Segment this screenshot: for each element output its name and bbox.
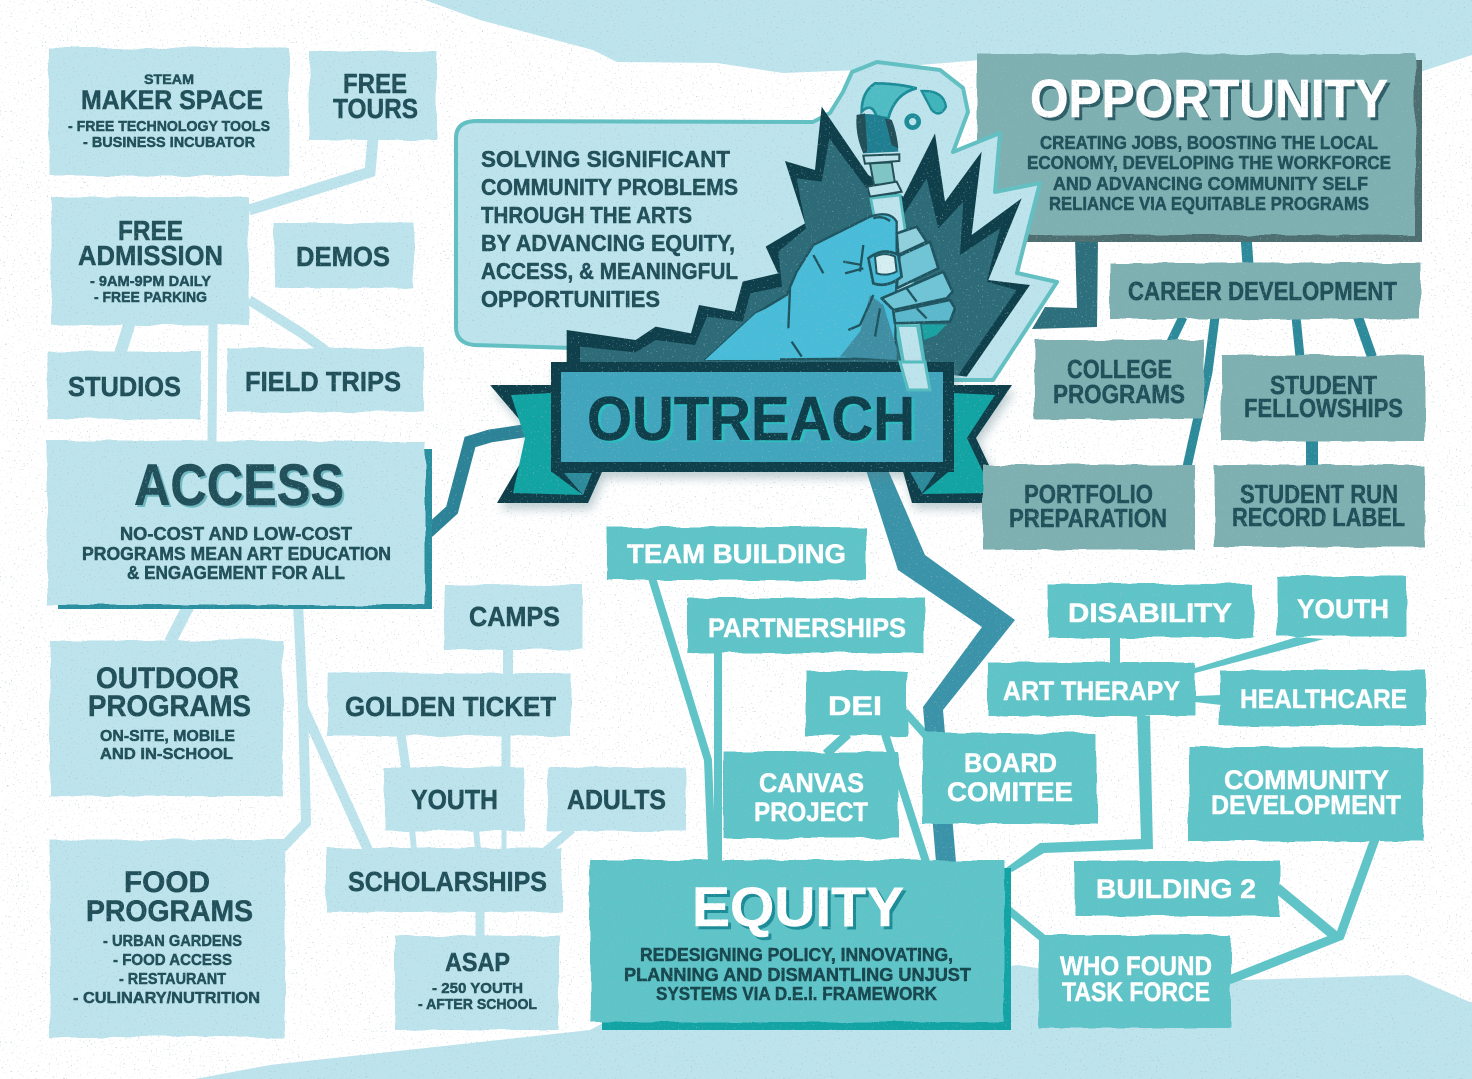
box: camps: CAMPS xyxy=(469,601,560,632)
text: mission statement: COMMUNITY PROBLEMS xyxy=(481,174,738,200)
box: disability xyxy=(1048,584,1253,638)
text: opportunity description: RELIANCE VIA EQUITABLE PROGRAMS xyxy=(1049,194,1369,214)
text: access description: & ENGAGEMENT FOR ALL xyxy=(127,563,345,583)
box: student fellowships xyxy=(1222,355,1425,441)
panel: access xyxy=(47,441,432,609)
box: field trips: FIELD TRIPS xyxy=(245,366,401,397)
panel: opportunity xyxy=(977,54,1422,242)
box: dei: DEI xyxy=(828,691,882,721)
connectors: equity branch xyxy=(652,578,1375,980)
text: opportunity description: ECONOMY, DEVELOPING THE WORKFORCE xyxy=(1027,153,1391,173)
box: field trips xyxy=(227,348,424,412)
box: asap: - 250 YOUTH xyxy=(432,980,523,997)
connector: outreach to access xyxy=(428,430,530,532)
box: partnerships xyxy=(687,598,924,653)
connector: art therapy to healthcare xyxy=(1195,695,1221,705)
box: maker space xyxy=(49,48,289,176)
box: asap xyxy=(395,936,559,1030)
box: who found task force: TASK FORCE xyxy=(1062,977,1210,1007)
box: free admission xyxy=(51,197,249,325)
ribbon tail: right xyxy=(902,385,1012,503)
banner: outreach xyxy=(490,362,1012,503)
box: team building: TEAM BUILDING xyxy=(627,539,846,569)
box: youth (therapy): YOUTH xyxy=(1297,594,1389,624)
text: equity description xyxy=(624,945,971,1004)
box: asap: - AFTER SCHOOL xyxy=(418,996,537,1013)
box: youth xyxy=(385,767,524,831)
box: canvas project: PROJECT xyxy=(754,797,868,827)
thumb xyxy=(868,252,902,285)
box: building 2 xyxy=(1075,861,1279,916)
box: partnerships: PARTNERSHIPS xyxy=(708,613,906,643)
box: portfolio preparation: PORTFOLIO xyxy=(1024,479,1153,509)
box: studios xyxy=(48,352,201,419)
fingers xyxy=(897,227,927,255)
brush handle xyxy=(871,195,928,390)
brush handle lower section xyxy=(897,326,928,390)
box: outdoor programs xyxy=(50,640,283,796)
connector: art therapy to youth xyxy=(1195,637,1324,673)
box: board comitee: BOARD xyxy=(964,748,1057,778)
text: equity description: SYSTEMS VIA D.E.I. FRAMEWORK xyxy=(656,984,937,1004)
text: equity description: REDESIGNING POLICY, INNOVATING, xyxy=(640,945,953,965)
box: free tours xyxy=(309,51,437,140)
connectors: access branch xyxy=(120,138,572,938)
ribbon centre xyxy=(551,362,954,472)
text: mission statement: BY ADVANCING EQUITY, xyxy=(481,230,735,256)
text: opportunity description: CREATING JOBS, BOOSTING THE LOCAL xyxy=(1040,133,1378,153)
box: disability: DISABILITY xyxy=(1068,598,1232,628)
illustration: fist holding paintbrush xyxy=(567,83,1030,390)
heading: opportunity: OPPORTUNITY xyxy=(1030,69,1388,129)
text: mission statement: ACCESS, & MEANINGFUL xyxy=(481,258,738,284)
box: board comitee xyxy=(923,733,1097,824)
box: adults xyxy=(547,767,686,831)
box: canvas project: CANVAS xyxy=(759,768,864,798)
box: portfolio preparation: PREPARATION xyxy=(1009,503,1167,533)
box: healthcare: HEALTHCARE xyxy=(1240,684,1407,714)
burst: outline xyxy=(567,107,1030,377)
box: community development: DEVELOPMENT xyxy=(1211,790,1401,820)
box: golden ticket: GOLDEN TICKET xyxy=(345,691,556,722)
hand xyxy=(705,214,897,360)
box: adults: ADULTS xyxy=(567,784,666,815)
box: career development xyxy=(1110,263,1420,319)
paint on bristles xyxy=(862,83,917,118)
box: food programs: - CULINARY/NUTRITION xyxy=(73,990,260,1007)
box: outdoor programs: OUTDOOR xyxy=(96,662,239,695)
box: student fellowships: STUDENT xyxy=(1270,370,1377,400)
box: team building xyxy=(607,527,866,580)
box: maker space: MAKER SPACE xyxy=(81,85,263,115)
background shape: top band xyxy=(425,0,1472,73)
heading: outreach: OUTREACH xyxy=(587,385,915,454)
box: free admission: - FREE PARKING xyxy=(94,289,207,306)
box: demos xyxy=(274,223,414,288)
ferrule xyxy=(870,162,895,185)
burst: fill xyxy=(580,138,1017,375)
box: building 2: BUILDING 2 xyxy=(1096,874,1256,904)
box: dei xyxy=(806,671,907,736)
connector: opportunity to career development xyxy=(1032,238,1098,329)
box: scholarships: SCHOLARSHIPS xyxy=(348,866,547,897)
box: food programs: - FOOD ACCESS xyxy=(113,952,232,969)
box: food programs: FOOD xyxy=(124,866,210,899)
text: mission statement xyxy=(481,146,738,312)
box: student run record label: RECORD LABEL xyxy=(1232,502,1405,532)
box: art therapy: ART THERAPY xyxy=(1003,676,1180,706)
text: opportunity description: AND ADVANCING COMMUNITY SELF xyxy=(1053,174,1368,194)
box: food programs: PROGRAMS xyxy=(86,895,253,928)
box: art therapy xyxy=(988,662,1195,716)
box: college programs: PROGRAMS xyxy=(1053,379,1185,409)
text: equity description: PLANNING AND DISMANTLING UNJUST xyxy=(624,965,971,985)
panel: equity xyxy=(590,860,1011,1030)
box: demos: DEMOS xyxy=(296,241,390,272)
box: free admission: ADMISSION xyxy=(78,240,223,271)
box: student run record label xyxy=(1214,465,1425,547)
box: free admission: FREE xyxy=(118,215,183,246)
box: healthcare xyxy=(1220,670,1426,726)
box: college programs xyxy=(1034,340,1204,419)
connector: art therapy to equity xyxy=(1006,716,1153,872)
box: portfolio preparation xyxy=(983,465,1195,550)
text: opportunity description xyxy=(1027,133,1391,214)
box: community development xyxy=(1189,747,1423,841)
box: free admission: - 9AM-9PM DAILY xyxy=(90,273,211,290)
box: free tours: TOURS xyxy=(333,93,418,124)
box: food programs: - RESTAURANT xyxy=(119,971,226,988)
box: youth (therapy) xyxy=(1277,576,1407,636)
background shape: bottom band xyxy=(195,965,1472,1079)
box: scholarships xyxy=(326,848,562,912)
connectors: opportunity branch xyxy=(1171,236,1372,467)
ribbon tail: left xyxy=(490,385,602,503)
text: access description: NO-COST AND LOW-COST xyxy=(120,524,352,544)
heading: equity: EQUITY xyxy=(692,875,904,938)
box: career development: CAREER DEVELOPMENT xyxy=(1128,276,1397,306)
box: maker space: - FREE TECHNOLOGY TOOLS xyxy=(68,118,270,135)
box: student fellowships: FELLOWSHIPS xyxy=(1244,393,1403,423)
text: mission statement: OPPORTUNITIES xyxy=(481,286,660,312)
box: free tours: FREE xyxy=(343,68,407,99)
box: maker space: STEAM xyxy=(144,71,194,87)
box: student run record label: STUDENT RUN xyxy=(1240,479,1398,509)
box: food programs: - URBAN GARDENS xyxy=(103,933,242,950)
box: community development: COMMUNITY xyxy=(1224,765,1389,795)
text: mission statement: THROUGH THE ARTS xyxy=(481,202,692,228)
box: food programs xyxy=(50,840,285,1037)
connector: outreach to equity xyxy=(866,470,1015,862)
text: mission statement: SOLVING SIGNIFICANT xyxy=(481,146,730,172)
box: maker space: - BUSINESS INCUBATOR xyxy=(83,134,255,151)
box: asap: ASAP xyxy=(445,947,510,977)
box: golden ticket xyxy=(328,673,571,736)
heading: access: ACCESS xyxy=(134,453,344,518)
box: board comitee: COMITEE xyxy=(947,777,1073,807)
box: outdoor programs: ON-SITE, MOBILE xyxy=(100,728,235,745)
brush bristles xyxy=(856,114,898,153)
box: college programs: COLLEGE xyxy=(1067,354,1172,384)
box: who found task force: WHO FOUND xyxy=(1060,951,1212,981)
brush handle end over banner xyxy=(900,362,930,390)
box: youth: YOUTH xyxy=(411,784,498,815)
illustration: speech bubble and brush halo xyxy=(456,62,1057,380)
box: studios: STUDIOS xyxy=(68,371,181,402)
paint drops xyxy=(922,91,946,113)
text: access description: PROGRAMS MEAN ART EDUCATION xyxy=(82,544,391,564)
box: camps xyxy=(444,585,583,650)
box: outdoor programs: AND IN-SCHOOL xyxy=(100,746,233,763)
box: who found task force xyxy=(1039,935,1231,1028)
text: access description xyxy=(82,524,391,583)
box: outdoor programs: PROGRAMS xyxy=(88,690,251,723)
box: canvas project xyxy=(723,752,898,838)
